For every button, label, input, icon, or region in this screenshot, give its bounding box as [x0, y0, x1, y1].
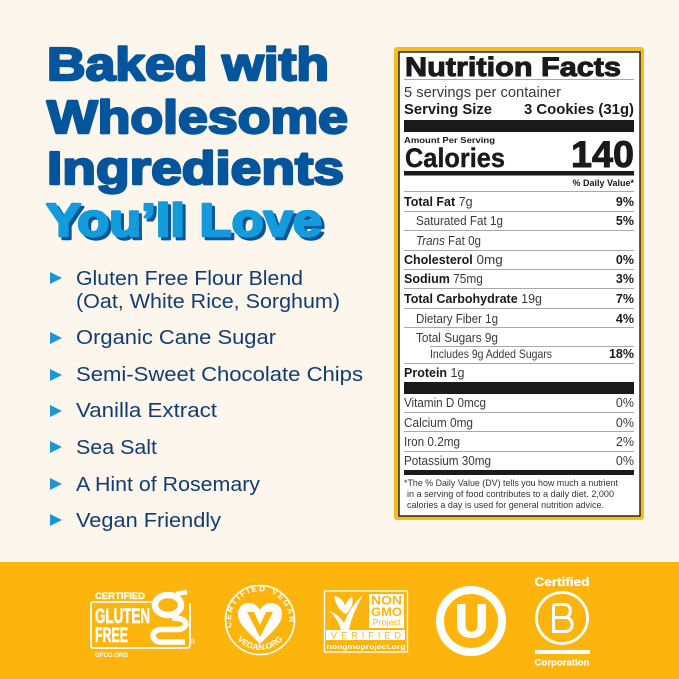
icon: non-GMO project verified — [324, 591, 408, 652]
icon: certified gluten free: GLUTEN — [95, 605, 150, 628]
icon: non-GMO project verified: NON — [371, 596, 402, 608]
calories — [405, 134, 634, 175]
nutrient rows: 3% — [616, 272, 634, 286]
nutrient rows: 9% — [616, 195, 634, 209]
icon: non-GMO project verified: GMO — [371, 607, 402, 619]
icon: certified B corporation — [534, 575, 590, 668]
icon: certified gluten free — [91, 591, 196, 659]
heading: Baked with Wholesome Ingredients You'll Love: Ingredients — [47, 142, 344, 194]
check mark and butterfly — [329, 595, 363, 630]
icon: certified B corporation: Corporation — [534, 658, 590, 668]
panel: nutrition facts label — [394, 47, 644, 520]
icon: certified vegan: VEGAN.ORG — [238, 635, 282, 650]
nutrient rows: Total Fat 7g — [404, 195, 473, 209]
vitamins and minerals: Vitamin D 0mcg — [404, 396, 486, 410]
nutrient rows: Total Carbohydrate 19g — [404, 292, 542, 306]
icon: certified gluten free: CERTIFIED — [95, 591, 146, 601]
nutrient rows: Total Sugars 9g — [416, 331, 498, 345]
nutrient rows: 18% — [609, 347, 634, 361]
heading: Baked with Wholesome Ingredients You'll Love: Baked with — [47, 38, 329, 90]
panel: certification band — [0, 562, 679, 679]
nutrient rows — [404, 195, 634, 380]
panel: nutrition facts label: Serving Size — [404, 101, 492, 118]
nutrient rows: Dietary Fiber 1g — [416, 312, 498, 326]
vitamins and minerals — [404, 396, 634, 468]
bullet: A Hint of Rosemary: A Hint of Rosemary — [76, 474, 260, 496]
bullet: Vanilla Extract: Vanilla Extract — [76, 400, 217, 422]
nutrition facts title: Nutrition Facts — [405, 52, 621, 82]
nutrient rows: Cholesterol 0mg — [404, 253, 503, 267]
nutrient rows: Includes 9g Added Sugars — [430, 347, 552, 361]
calories: 140 — [571, 134, 634, 175]
icon: certified gluten free: FREE — [95, 624, 128, 647]
icon: non-GMO project verified: nongmoproject.org — [326, 642, 406, 651]
bullet: Gluten Free Flour Blend: Gluten Free Flour Blend — [76, 268, 303, 290]
bullet: Gluten Free Flour Blend — [50, 268, 340, 313]
vitamins and minerals: Iron 0.2mg — [404, 435, 460, 449]
vitamins and minerals: 0% — [616, 396, 634, 410]
nutrient rows: 4% — [616, 312, 634, 326]
bullet: Vegan Friendly: Vegan Friendly — [76, 510, 221, 532]
vitamins and minerals: Calcium 0mg — [404, 416, 473, 430]
bullet: Sea Salt: Sea Salt — [76, 437, 157, 459]
panel: nutrition facts label: % Daily Value* — [572, 178, 634, 188]
nutrient rows: Saturated Fat 1g — [416, 214, 503, 228]
bullet: Semi-Sweet Chocolate Chips: Semi-Sweet Chocolate Chips — [76, 364, 363, 386]
icon: certified gluten free: GFCO.ORG — [95, 652, 128, 659]
icon: certified vegan: CERTIFIED VEGAN — [226, 586, 294, 628]
heading: Baked with Wholesome Ingredients You'll Love: You’ll Love — [49, 197, 325, 249]
bullet: Organic Cane Sugar: Organic Cane Sugar — [76, 327, 276, 349]
heading: Baked with Wholesome Ingredients You'll Love: You’ll Love — [46, 194, 322, 246]
panel: nutrition facts label: Amount Per Serving — [404, 135, 495, 145]
panel: nutrition facts label: 5 servings per container — [404, 84, 561, 101]
bullet: Gluten Free Flour Blend: (Oat, White Rice, Sorghum) — [76, 291, 340, 313]
icon: certified B corporation: Certified — [534, 575, 590, 589]
nutrient rows: Sodium 75mg — [404, 272, 483, 286]
icon: non-GMO project verified: VERIFIED — [331, 630, 402, 640]
vitamins and minerals: 0% — [616, 454, 634, 468]
icon: certified vegan — [224, 584, 296, 656]
footnote: *The % Daily Value (DV) tells you how much a nutrient — [404, 478, 618, 488]
icon: OU kosher — [440, 590, 502, 652]
footnote: in a serving of food contributes to a daily diet. 2,000 — [407, 489, 614, 499]
icon: non-GMO project verified: Project — [372, 618, 401, 628]
nutrient rows: 5% — [616, 214, 634, 228]
vitamins and minerals: Potassium 30mg — [404, 454, 491, 468]
nutrient rows: Protein 1g — [404, 366, 464, 380]
heading: Baked with Wholesome Ingredients You'll Love — [46, 38, 348, 249]
nutrient rows: 7% — [616, 292, 634, 306]
ingredient list — [50, 268, 363, 532]
footnote: calories a day is used for general nutrition advice. — [407, 500, 604, 510]
footnote — [404, 478, 618, 510]
vitamins and minerals: 2% — [616, 435, 634, 449]
icon: certified gluten free: ® — [190, 638, 196, 646]
nutrient rows: Trans Fat 0g — [416, 234, 481, 248]
heading: Baked with Wholesome Ingredients You'll Love: Wholesome — [47, 91, 348, 143]
panel: nutrition facts label: 3 Cookies (31g) — [524, 101, 634, 118]
vitamins and minerals: 0% — [616, 416, 634, 430]
nutrient rows: 0% — [616, 253, 634, 267]
calories: Calories — [405, 143, 505, 173]
